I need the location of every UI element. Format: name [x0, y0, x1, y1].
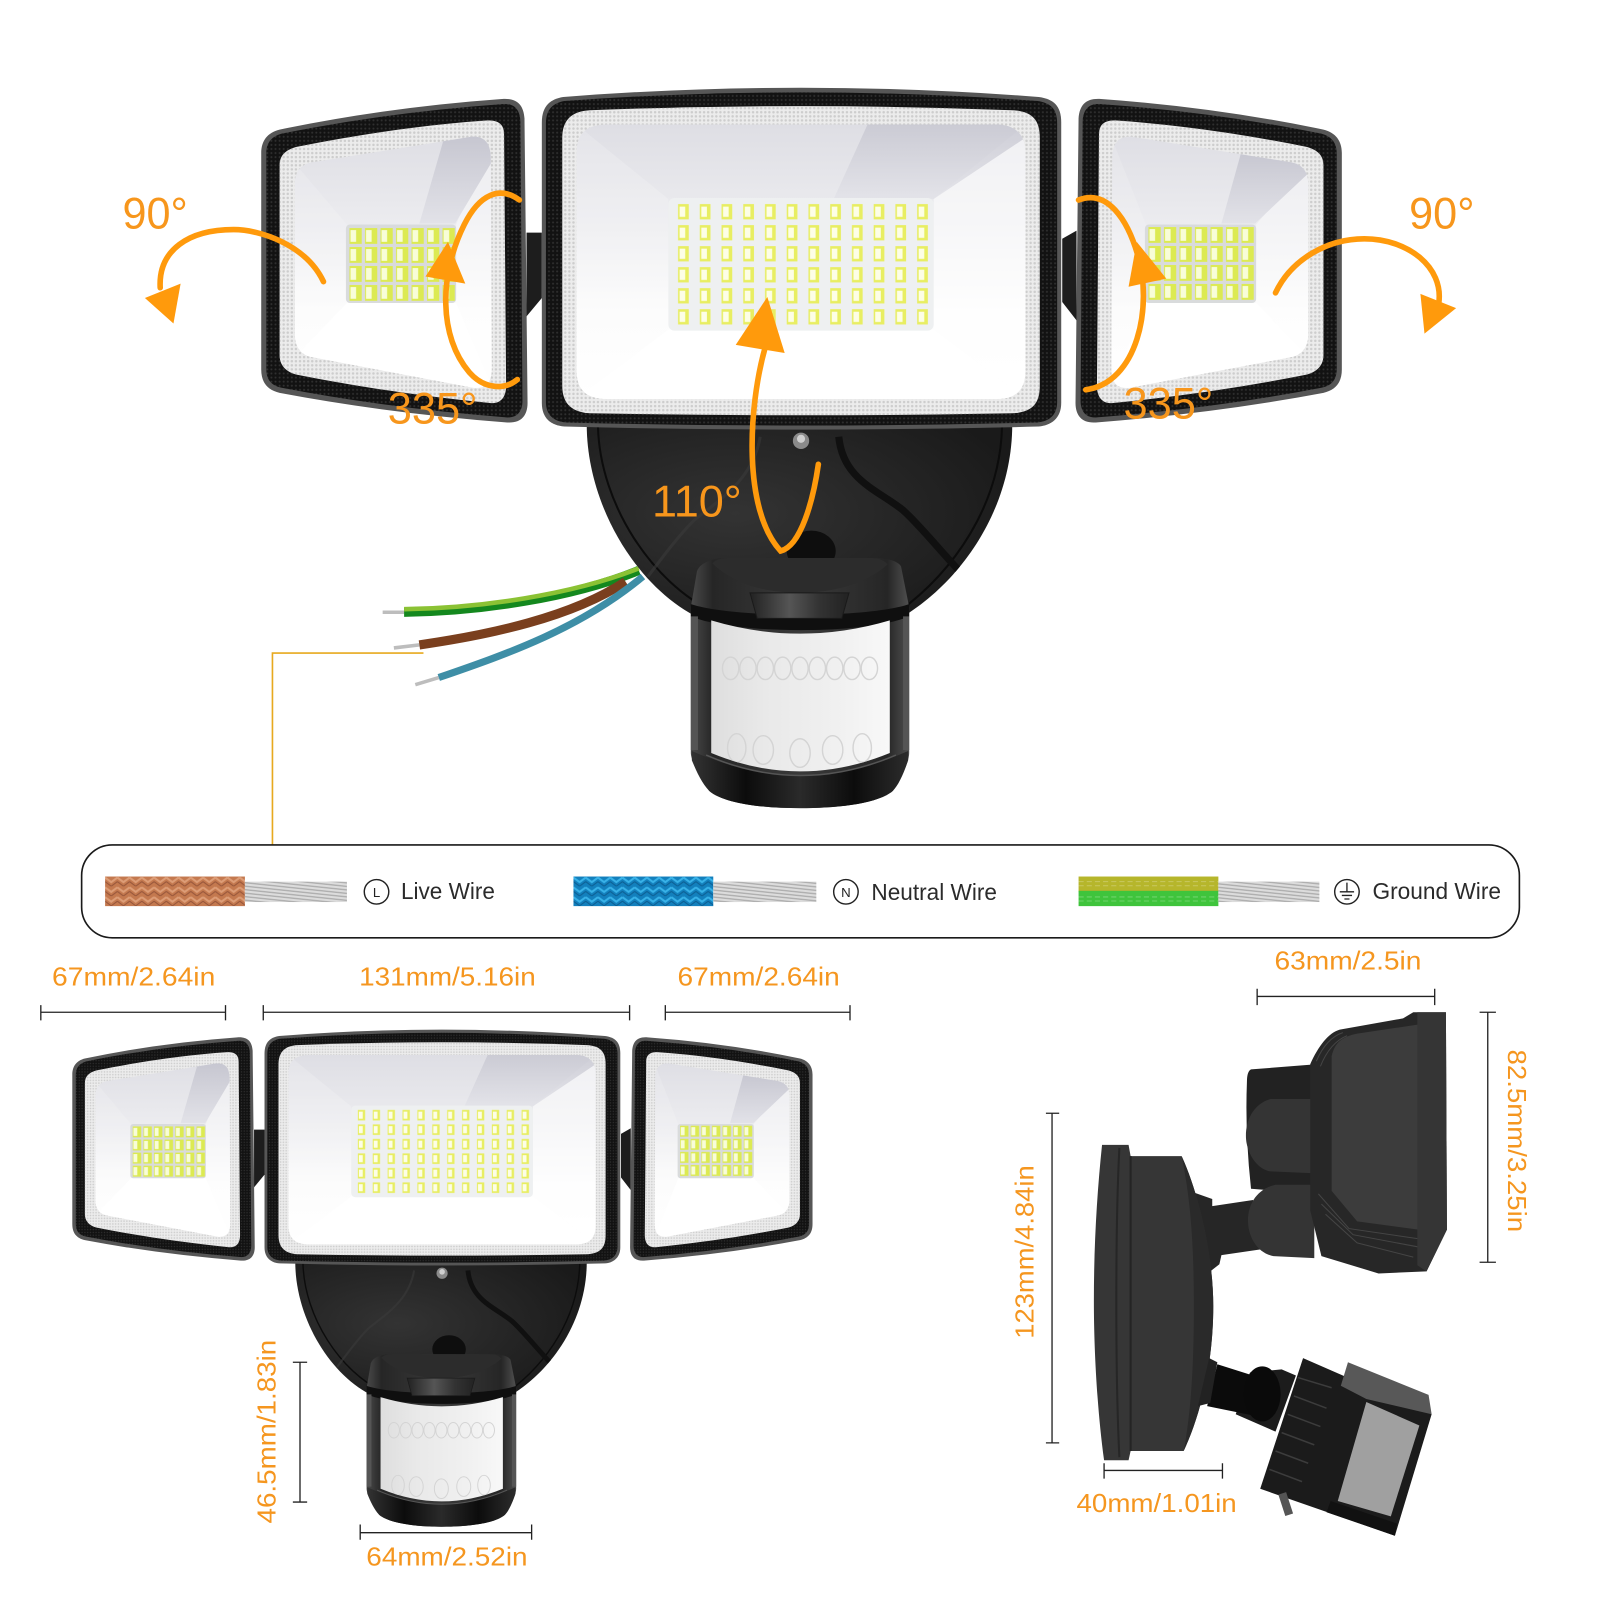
lower base plate: [295, 1262, 587, 1399]
dimension: left head width: [41, 964, 226, 1020]
side: sensor swivel: [1198, 1358, 1296, 1432]
icon: ground: [1335, 880, 1359, 904]
right lamp head: [1076, 99, 1342, 423]
icon: N: [834, 880, 858, 904]
dimension: side housing height: 82.5mm/3.25in: [1502, 1049, 1530, 1232]
label: left 335 degrees: 335°: [388, 382, 478, 433]
wires: green, brown and blue leads: [383, 568, 643, 685]
dimension: sensor height: [254, 1340, 307, 1523]
label: live wire: Live Wire: [401, 878, 495, 904]
left lamp head: [261, 99, 528, 423]
label: ground wire: Ground Wire: [1372, 878, 1501, 904]
dimension: side housing depth: [1257, 947, 1435, 1005]
label: neutral wire: Neutral Wire: [871, 879, 997, 905]
dimension: sensor height: 46.5mm/1.83in: [254, 1340, 282, 1523]
dimension: right head width: [665, 964, 850, 1020]
center lamp head: [542, 88, 1061, 430]
dimension: plate depth: 40mm/1.01in: [1077, 1490, 1237, 1518]
dimension: side housing height: [1480, 1012, 1530, 1262]
panel: wire legend: [82, 845, 1519, 938]
lower motion sensor: [367, 1354, 516, 1527]
callout line from wires to legend: [272, 653, 423, 845]
neutral wire sample: [573, 877, 816, 906]
label: right 335 degrees: 335°: [1123, 377, 1213, 428]
base plate: [587, 424, 1012, 622]
arrow: right head 335 degree rotation: [1079, 198, 1166, 390]
arrow: center head 110 degree tilt: [736, 297, 818, 551]
motion sensor: [691, 558, 909, 808]
lower arm connectors: [254, 1128, 631, 1190]
lower center head: [265, 1030, 620, 1266]
arm connectors: [527, 231, 1077, 320]
lower right head: [630, 1037, 813, 1261]
icon: L: L: [373, 885, 380, 900]
side: sensor lens: [1338, 1402, 1419, 1516]
side: swivel covers: [1246, 1099, 1319, 1258]
dimension: side housing depth: 63mm/2.5in: [1274, 947, 1421, 975]
dimension: sensor width: 64mm/2.52in: [366, 1543, 528, 1571]
dimension: center head width: [263, 964, 630, 1020]
arrow: left head 90 degree tilt: [145, 230, 323, 323]
dimension: center head width: 131mm/5.16in: [359, 964, 536, 992]
icon: L: [364, 880, 389, 904]
side: lamp housing: [1310, 1012, 1447, 1273]
dimension: plate depth: [1077, 1463, 1237, 1518]
ground wire sample: [1079, 877, 1319, 906]
dimension: right head width: 67mm/2.64in: [678, 964, 840, 992]
side: wall plate: [1094, 1145, 1213, 1460]
arrow: left head 335 degree rotation: [426, 193, 519, 387]
side: sensor body: [1260, 1358, 1432, 1536]
product side view: [1094, 1012, 1447, 1536]
dimension: left head width: 67mm/2.64in: [52, 964, 215, 992]
dimension: sensor width: [360, 1524, 532, 1571]
arrow: right head 90 degree tilt: [1276, 239, 1456, 334]
label: right 90 degrees: 90°: [1409, 188, 1474, 239]
icon: N: N: [841, 885, 851, 900]
side: upper knuckle: [1246, 1064, 1316, 1194]
main product front view: [261, 88, 1342, 808]
lower left head: [72, 1037, 255, 1261]
live wire sample: [105, 877, 347, 906]
label: left 90 degrees: 90°: [122, 188, 188, 239]
product front view, lower: [72, 1030, 813, 1527]
dimension: overall plate height: [1012, 1113, 1059, 1443]
label: center 110 degrees: 110°: [652, 475, 742, 526]
dimension: overall plate height: 123mm/4.84in: [1012, 1165, 1040, 1339]
side: arm: [1195, 1193, 1263, 1271]
